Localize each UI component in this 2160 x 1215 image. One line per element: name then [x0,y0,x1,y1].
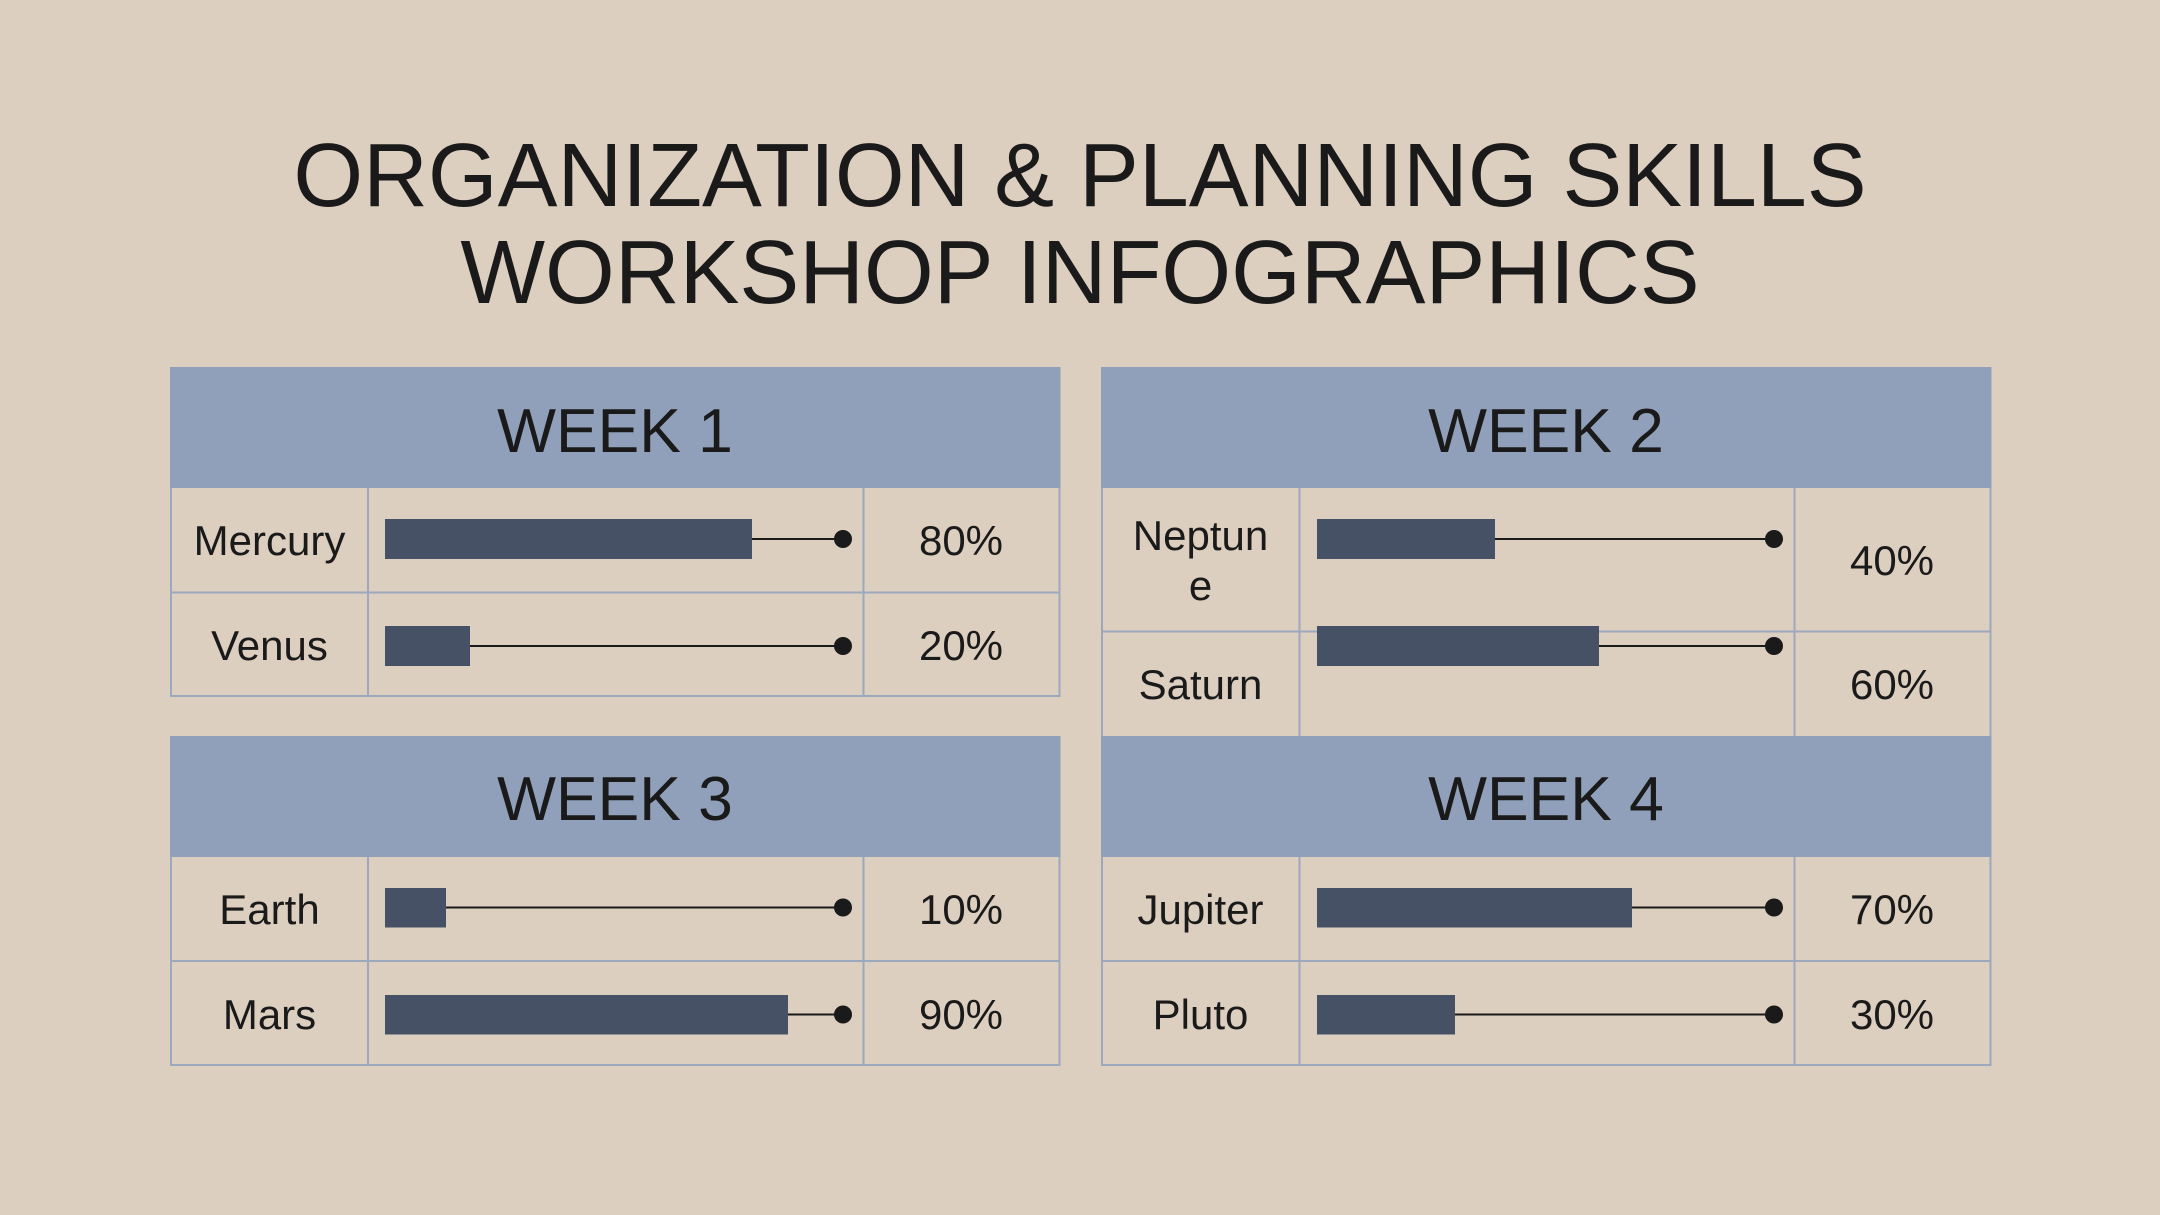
week 4 header: WEEK 4 [1428,765,1664,834]
row: Venus [211,622,1003,669]
row: Saturn [1139,626,1934,708]
row: Mercury [194,517,1003,564]
week 3 header [170,736,1060,857]
row: Venus: 20% [919,622,1003,669]
row: Jupiter: Jupiter [1137,886,1264,933]
panel: week 3 [170,736,1060,1065]
title: WORKSHOP INFOGRAPHICS [460,223,1700,323]
week 2 header [1101,367,1992,488]
row: Pluto [1153,991,1934,1038]
row: Earth: 10% [919,886,1003,933]
title: ORGANIZATION & PLANNING SKILLS [293,126,1867,226]
title [293,126,1867,323]
row: Mars: Mars [223,991,316,1038]
row: Saturn: Saturn [1139,661,1262,708]
row: Saturn: 60% [1850,661,1934,708]
panel: week 2 [1101,367,1992,736]
row: Jupiter: 70% [1850,886,1934,933]
row: Mars: 90% [919,991,1003,1038]
row: Jupiter [1137,886,1934,933]
week 1 header: WEEK 1 [497,397,733,466]
row: Mercury: Mercury [194,517,345,564]
week 1 header [170,367,1060,488]
row: Venus: Venus [211,622,328,669]
row: Earth [219,886,1003,933]
row: Neptune: e [1189,562,1212,609]
week 3 header: WEEK 3 [497,765,733,834]
row: Neptune: 40% [1850,537,1934,584]
row: Neptune [1133,512,1934,609]
row: Pluto: Pluto [1153,991,1248,1038]
panel: week 1 [170,367,1060,696]
panel: week 4 [1101,736,1992,1065]
row: Earth: Earth [219,886,320,933]
row: Mars [223,991,1003,1038]
row: Neptune: Neptun [1133,512,1268,559]
row: Pluto: 30% [1850,991,1934,1038]
row: Mercury: 80% [919,517,1003,564]
week 4 header [1101,736,1992,857]
week 2 header: WEEK 2 [1428,397,1664,466]
